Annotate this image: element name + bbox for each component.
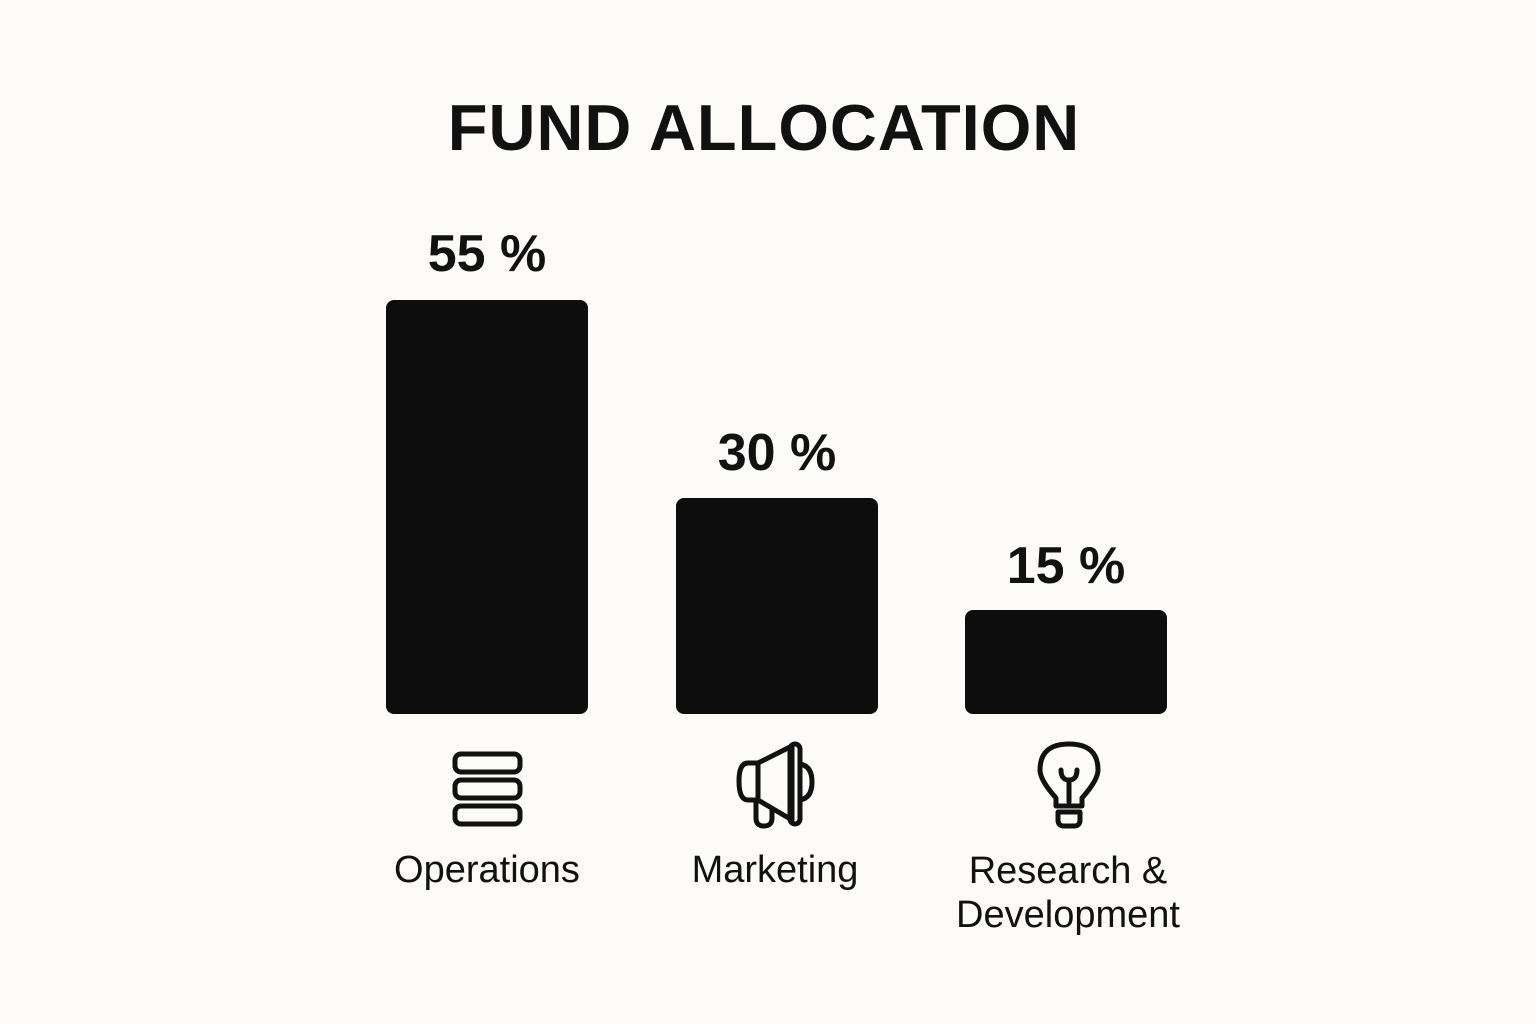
value label: 15%: 15 % <box>1007 537 1125 595</box>
icon: light bulb <box>1038 742 1100 828</box>
icon: megaphone <box>736 742 814 828</box>
label: operations: Operations <box>394 849 580 891</box>
icon: stacked layers <box>452 752 522 826</box>
title: FUND ALLOCATION <box>448 91 1080 164</box>
bar: marketing <box>676 498 878 714</box>
label: research & development <box>956 850 1180 936</box>
value label: 55%: 55 % <box>428 225 546 283</box>
label: research & development: Development <box>956 894 1180 936</box>
bar: operations <box>386 300 588 714</box>
bar: research <box>965 610 1167 714</box>
label: marketing: Marketing <box>692 849 858 891</box>
label: research & development: Research & <box>969 850 1167 892</box>
value label: 30%: 30 % <box>718 424 836 482</box>
